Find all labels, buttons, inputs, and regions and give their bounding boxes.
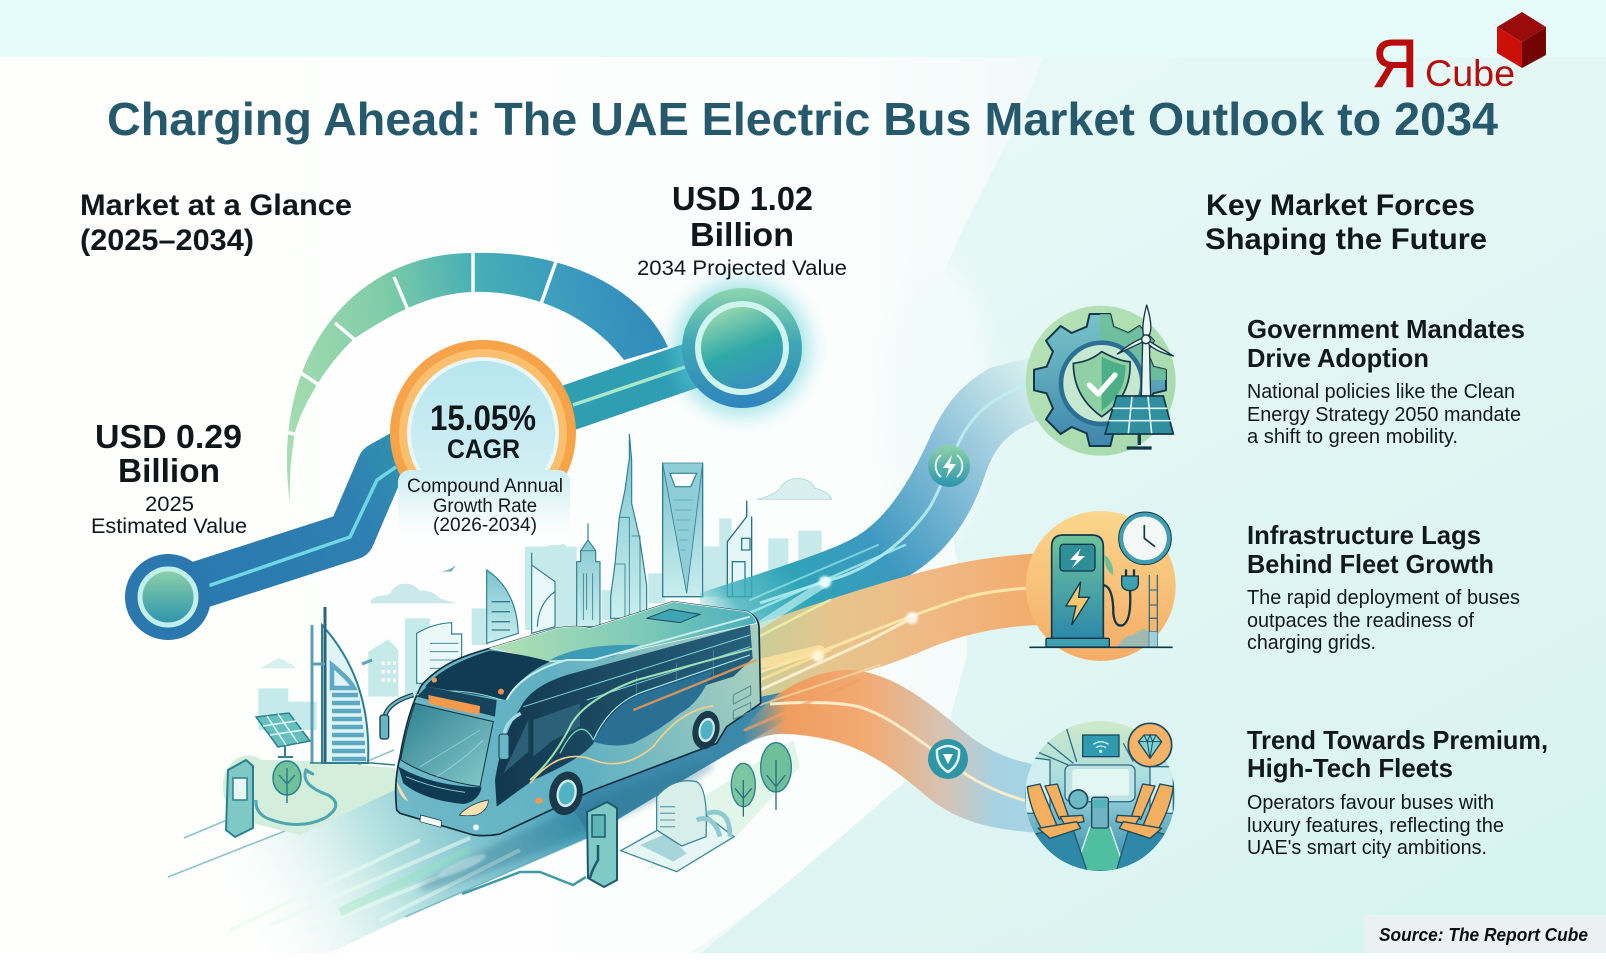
text: premium fleets: luxury features, reflecting the [1247, 815, 1504, 837]
heading: market at a glance: Market at a Glance [80, 189, 352, 222]
illustration: city skyline right [703, 478, 832, 598]
stat: 2034 value: USD 1.02 [672, 180, 813, 217]
text: government mandates: National policies like the Clean [1247, 381, 1515, 403]
stat: 2025 value: Estimated Value [91, 515, 247, 538]
CAGR dial: 15.05% [430, 399, 536, 438]
text: infrastructure: Behind Fleet Growth [1247, 549, 1494, 579]
heading: key market forces [1205, 189, 1487, 256]
stat: 2034 value [637, 180, 847, 280]
timeline band [168, 366, 690, 595]
CAGR dial: Growth Rate [433, 496, 537, 517]
heading: market at a glance: (2025–2034) [80, 224, 254, 257]
text: government mandates [1247, 314, 1525, 448]
illustration: left charger and tree [226, 760, 336, 837]
tapered tower [663, 463, 703, 597]
panel: key market forces [1025, 189, 1548, 871]
CAGR dial: CAGR [447, 434, 520, 464]
heading: key market forces: Shaping the Future [1205, 223, 1487, 256]
illustration: burj al arab and green hill [223, 607, 395, 835]
windows [495, 625, 753, 807]
stat: 2034 value: Billion [690, 216, 794, 253]
text: government mandates: Drive Adoption [1247, 343, 1429, 373]
text: infrastructure: charging grids. [1247, 632, 1376, 654]
CAGR dial: (2026-2034) [433, 515, 537, 536]
icon: gear shield turbine solar [1026, 305, 1176, 456]
title: Charging Ahead: The UAE Electric Bus Market Outlook to 2034 [107, 93, 1498, 145]
stream: blue to government mandates [700, 355, 1040, 640]
cloud [371, 584, 457, 603]
text: premium fleets [1247, 725, 1548, 859]
side panel swoosh [593, 670, 713, 745]
text: infrastructure: Infrastructure Lags [1247, 520, 1481, 550]
text: infrastructure [1247, 520, 1520, 654]
curved buildings [487, 570, 518, 643]
heading: key market forces: Key Market Forces [1206, 189, 1475, 222]
curved block [417, 623, 462, 683]
stat: 2025 value: 2025 [145, 493, 194, 516]
stream: orange to infrastructure [745, 553, 1040, 700]
marker: 2034 [674, 280, 810, 416]
mirrors [384, 695, 413, 723]
headlights plate [459, 800, 488, 816]
icon: premium bus interior [1025, 721, 1175, 871]
icon: charging pump and clock [1026, 511, 1176, 661]
cloud [757, 478, 832, 499]
seats left [1027, 784, 1084, 838]
text: premium fleets: UAE's smart city ambitions. [1247, 837, 1487, 859]
source credit [1364, 915, 1606, 953]
text: premium fleets: Operators favour buses with [1247, 792, 1494, 814]
marker: 2025 [125, 554, 211, 640]
front dark roof [425, 651, 550, 700]
seats right [1116, 784, 1173, 838]
illustration: generator and trees [621, 740, 800, 872]
illustration: road [164, 620, 795, 953]
badge: energy [928, 445, 970, 487]
illustration: city skyline left [258, 434, 720, 730]
text: premium fleets: High-Tech Fleets [1247, 753, 1453, 783]
small tower [577, 523, 600, 627]
stat: 2025 value [91, 418, 247, 538]
text: government mandates: Energy Strategy 2050 mandate [1247, 404, 1521, 426]
logo: RCube [1372, 12, 1546, 102]
text: infrastructure: outpaces the readiness of [1247, 610, 1474, 632]
logo: RCube: Cube [1425, 53, 1515, 94]
text: premium fleets: Trend Towards Premium, [1247, 725, 1548, 755]
logo: RCube: Я [1372, 26, 1418, 102]
source credit: Source: The Report Cube [1379, 925, 1588, 945]
speed lines [745, 545, 912, 730]
stream: orange-blue to premium fleets [745, 670, 1040, 833]
wheels [545, 768, 587, 818]
CAGR dial [390, 340, 576, 545]
text: government mandates: a shift to green mobility. [1247, 426, 1458, 448]
windshield [401, 703, 493, 787]
badge: shield [928, 739, 968, 779]
CAGR dial: Compound Annual [407, 476, 563, 497]
Burj tower [611, 434, 647, 618]
vents [733, 686, 751, 719]
text: infrastructure: The rapid deployment of buses [1247, 587, 1520, 609]
text: government mandates: Government Mandates [1247, 314, 1525, 344]
heading: market at a glance [80, 189, 352, 257]
gauge arc [282, 248, 668, 503]
destination sign [428, 695, 480, 715]
illustration: electric bus [380, 602, 761, 901]
body [396, 602, 761, 836]
stat: 2025 value: Billion [118, 452, 220, 489]
illustration: small solar panel [256, 713, 310, 757]
stat: 2034 value: 2034 Projected Value [637, 257, 847, 280]
stat: 2025 value: USD 0.29 [95, 418, 242, 455]
panel: market at a glance [80, 180, 847, 640]
roof [490, 602, 757, 662]
illustration: front charger [462, 802, 617, 894]
lower dark band [398, 767, 482, 804]
